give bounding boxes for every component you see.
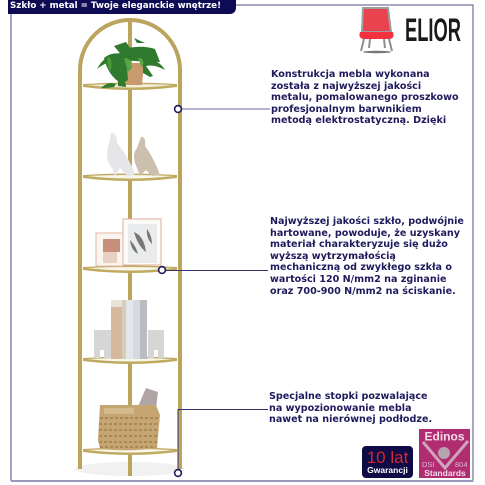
plant in pot: [97, 38, 165, 88]
text block: tempered glass: materiał charakteryzuje się dużo: [270, 239, 448, 250]
callout line: metal: [175, 106, 270, 112]
picture frames: [96, 219, 161, 266]
text block: metal construction: została z najwyższej jakości: [271, 81, 421, 92]
text block: metal construction: profesjonalnym barwnikiem: [271, 104, 422, 115]
badge: Edinos standards: DSI: [422, 460, 435, 469]
badge: 10 year warranty: Gwarancji: [367, 465, 408, 475]
badge: 10 year warranty: [362, 446, 413, 478]
text block: special feet: Specjalne stopki pozwalające: [269, 391, 428, 402]
badge: 10 year warranty: 10 lat: [367, 448, 409, 467]
ceramic birds: [107, 133, 160, 177]
text block: tempered glass: wyższą wytrzymałością: [270, 251, 396, 262]
text block: special feet: na wypozionowanie mebla: [269, 403, 412, 414]
title banner: [8, 0, 236, 14]
text block: tempered glass: mechaniczną od zwykłego szkła o: [270, 262, 452, 273]
shelves: [83, 82, 177, 455]
text block: tempered glass: wartości 120 N/mm2 na zginanie: [270, 274, 446, 285]
text block: metal construction: metalu, pomalowanego proszkowo: [271, 92, 459, 103]
title banner: Szkło + metal = Twoje eleganckie wnętrze!: [10, 1, 221, 11]
books and bookends: [94, 300, 164, 359]
text block: tempered glass: hartowane, powoduje, że uzyskany: [270, 228, 460, 239]
text block: special feet: nawet na nierównej podłodze.: [269, 414, 432, 425]
callout line: feet: [175, 410, 268, 476]
woven basket with magazines: [98, 388, 160, 450]
icon: red chair logo: [359, 8, 394, 53]
text block: metal construction: [271, 69, 459, 126]
badge: Edinos standards: Standards: [424, 468, 466, 478]
text block: metal construction: metodą elektrostatyczną. Dzięki: [271, 115, 446, 126]
text block: tempered glass: Najwyższej jakości szkło, podwójnie: [270, 216, 464, 227]
text block: special feet: [269, 391, 432, 425]
text block: tempered glass: oraz 700-900 N/mm2 na ściskanie.: [270, 286, 456, 297]
badge: Edinos standards: 804: [455, 460, 468, 469]
gold corner shelf: [80, 20, 180, 476]
text block: tempered glass: [270, 216, 464, 297]
floor shadow: [75, 462, 185, 476]
badge: Edinos standards: Edinos: [424, 430, 465, 444]
callout line: glass: [159, 267, 268, 273]
text block: metal construction: Konstrukcja mebla wykonana: [271, 69, 430, 80]
badge: Edinos standards: [419, 429, 470, 478]
arch and posts: [80, 20, 180, 476]
